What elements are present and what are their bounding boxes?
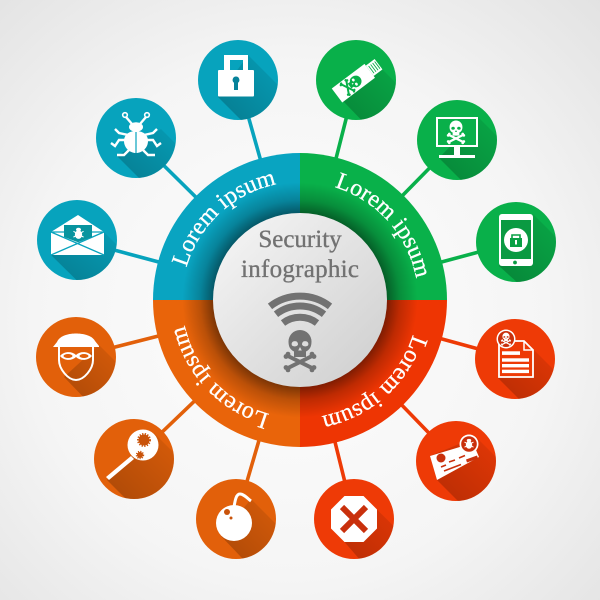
ring segment: red (300, 300, 447, 447)
icon circle: phone (476, 202, 556, 282)
wifi arcs (270, 296, 330, 323)
connector lines (76, 80, 516, 519)
title: Security (258, 226, 342, 253)
icon circle: burglar mask (36, 317, 116, 397)
title: infographic (241, 256, 359, 283)
ring segment: blue (153, 153, 300, 300)
icon circle: stop (314, 479, 394, 559)
icon: wifi skull (270, 296, 330, 372)
ring label: orange: Lorem ipsum (174, 326, 269, 430)
central ring (153, 153, 447, 447)
ring segment: green (300, 153, 447, 300)
icon circle: lock (198, 40, 278, 120)
ring label: blue: Lorem ipsum (172, 174, 276, 267)
icon circle: magnifier (94, 419, 174, 499)
icon circle: document (475, 319, 555, 399)
icon circle: usb drive (316, 40, 396, 120)
icon circle: bomb (196, 479, 276, 559)
icon circle: monitor (417, 100, 497, 180)
icon circle: credit card (416, 421, 496, 501)
ring inner shadow (153, 153, 447, 447)
ring segment: orange (153, 300, 300, 447)
skull and crossbones (284, 330, 316, 372)
icon circle: bug (96, 98, 176, 178)
icon circle: mail (37, 200, 117, 280)
ring label: green: Lorem ipsum (335, 172, 426, 278)
center disc (213, 213, 387, 387)
ring label: red: Lorem ipsum (322, 335, 428, 426)
